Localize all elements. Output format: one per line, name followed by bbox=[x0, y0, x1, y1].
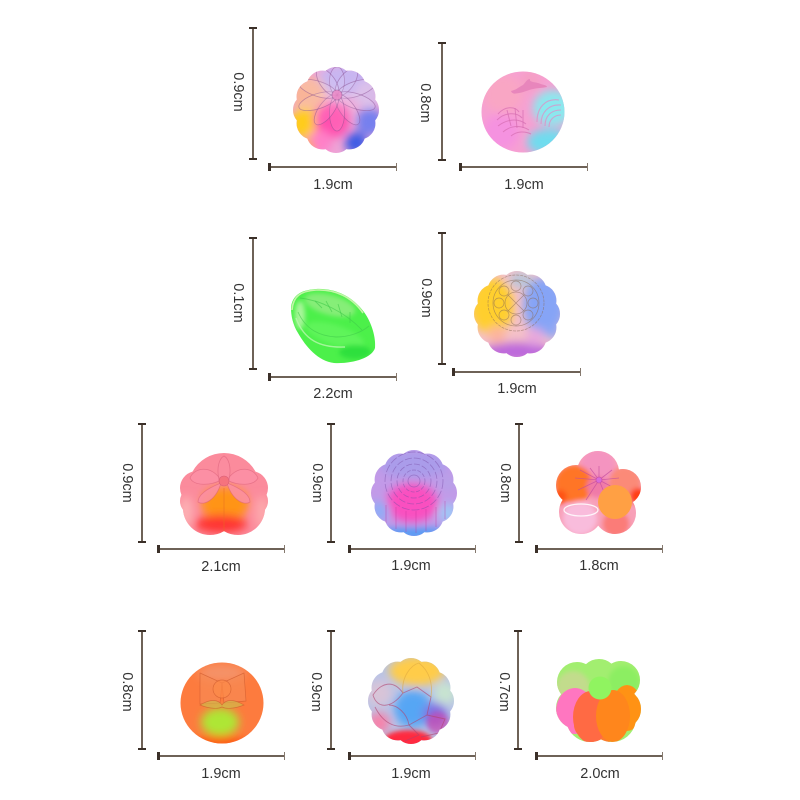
mooncake: chrysanthemum rainbow bbox=[293, 67, 379, 153]
width dimension 2.1cm bbox=[157, 545, 285, 575]
width dimension 2.0cm bbox=[535, 752, 663, 782]
width dimension 1.9cm: 1.9cm bbox=[504, 177, 544, 193]
height dimension 0.7cm: 0.7cm bbox=[496, 672, 512, 712]
panel: item 2 bbox=[417, 42, 588, 193]
width dimension 1.9cm bbox=[459, 163, 588, 193]
height dimension 0.8cm bbox=[119, 630, 146, 750]
width dimension 1.9cm bbox=[452, 368, 581, 397]
mooncake: neon pumpkin bbox=[556, 659, 641, 742]
panel: item 10 bbox=[496, 630, 663, 782]
height dimension 0.9cm bbox=[309, 423, 335, 543]
mooncake: ornate yellow and blue bbox=[474, 271, 560, 357]
mooncake: plum blossom bbox=[556, 451, 641, 534]
mooncake: pink flower with orange heart bbox=[180, 453, 268, 535]
width dimension 1.9cm: 1.9cm bbox=[497, 381, 537, 397]
width dimension 1.9cm: 1.9cm bbox=[313, 177, 353, 193]
width dimension 2.2cm bbox=[268, 373, 397, 402]
mooncake: green leaf bbox=[291, 288, 376, 364]
width dimension 1.9cm bbox=[268, 163, 397, 193]
panel: item 8 bbox=[119, 630, 285, 782]
height dimension 0.8cm: 0.8cm bbox=[417, 83, 433, 123]
width dimension 1.9cm: 1.9cm bbox=[391, 766, 431, 782]
panel: item 3 bbox=[230, 237, 397, 402]
height dimension 0.9cm bbox=[119, 423, 146, 543]
height dimension 0.9cm: 0.9cm bbox=[418, 278, 434, 318]
height dimension 0.9cm bbox=[418, 232, 446, 365]
mooncake: lavender peony bbox=[369, 448, 459, 539]
width dimension 1.8cm: 1.8cm bbox=[579, 558, 619, 574]
width dimension 2.2cm: 2.2cm bbox=[313, 386, 353, 402]
width dimension 1.8cm bbox=[535, 545, 663, 574]
width dimension 1.9cm bbox=[348, 545, 476, 574]
panel: item 4 bbox=[418, 232, 581, 397]
panel: item 7 bbox=[497, 423, 663, 574]
height dimension 0.8cm bbox=[417, 42, 446, 161]
height dimension 0.1cm: 0.1cm bbox=[230, 283, 246, 323]
height dimension 0.7cm bbox=[496, 630, 522, 750]
width dimension 1.9cm bbox=[157, 752, 285, 782]
width dimension 2.0cm: 2.0cm bbox=[580, 766, 620, 782]
height dimension 0.9cm bbox=[308, 630, 335, 750]
panel: item 6 bbox=[309, 423, 476, 574]
panel: item 1 bbox=[230, 27, 397, 193]
front orange petal bbox=[598, 485, 632, 519]
width dimension 1.9cm bbox=[348, 752, 476, 782]
mooncake: rabbit and waves bbox=[482, 72, 564, 152]
mooncake: orange persimmon bbox=[180, 662, 264, 744]
height dimension 0.8cm bbox=[497, 423, 523, 543]
height dimension 0.1cm bbox=[230, 237, 257, 370]
width dimension 2.1cm: 2.1cm bbox=[201, 559, 241, 575]
mooncake: rainbow lotus bbox=[368, 658, 454, 744]
height dimension 0.9cm: 0.9cm bbox=[308, 672, 324, 712]
height dimension 0.8cm: 0.8cm bbox=[497, 463, 513, 503]
height dimension 0.9cm bbox=[230, 27, 257, 160]
width dimension 1.9cm: 1.9cm bbox=[201, 766, 241, 782]
panel: item 9 bbox=[308, 630, 476, 782]
height dimension 0.9cm: 0.9cm bbox=[230, 72, 246, 112]
height dimension 0.9cm: 0.9cm bbox=[119, 463, 135, 503]
panel: item 5 bbox=[119, 423, 285, 575]
width dimension 1.9cm: 1.9cm bbox=[391, 558, 431, 574]
height dimension 0.8cm: 0.8cm bbox=[119, 672, 135, 712]
height dimension 0.9cm: 0.9cm bbox=[309, 463, 325, 503]
